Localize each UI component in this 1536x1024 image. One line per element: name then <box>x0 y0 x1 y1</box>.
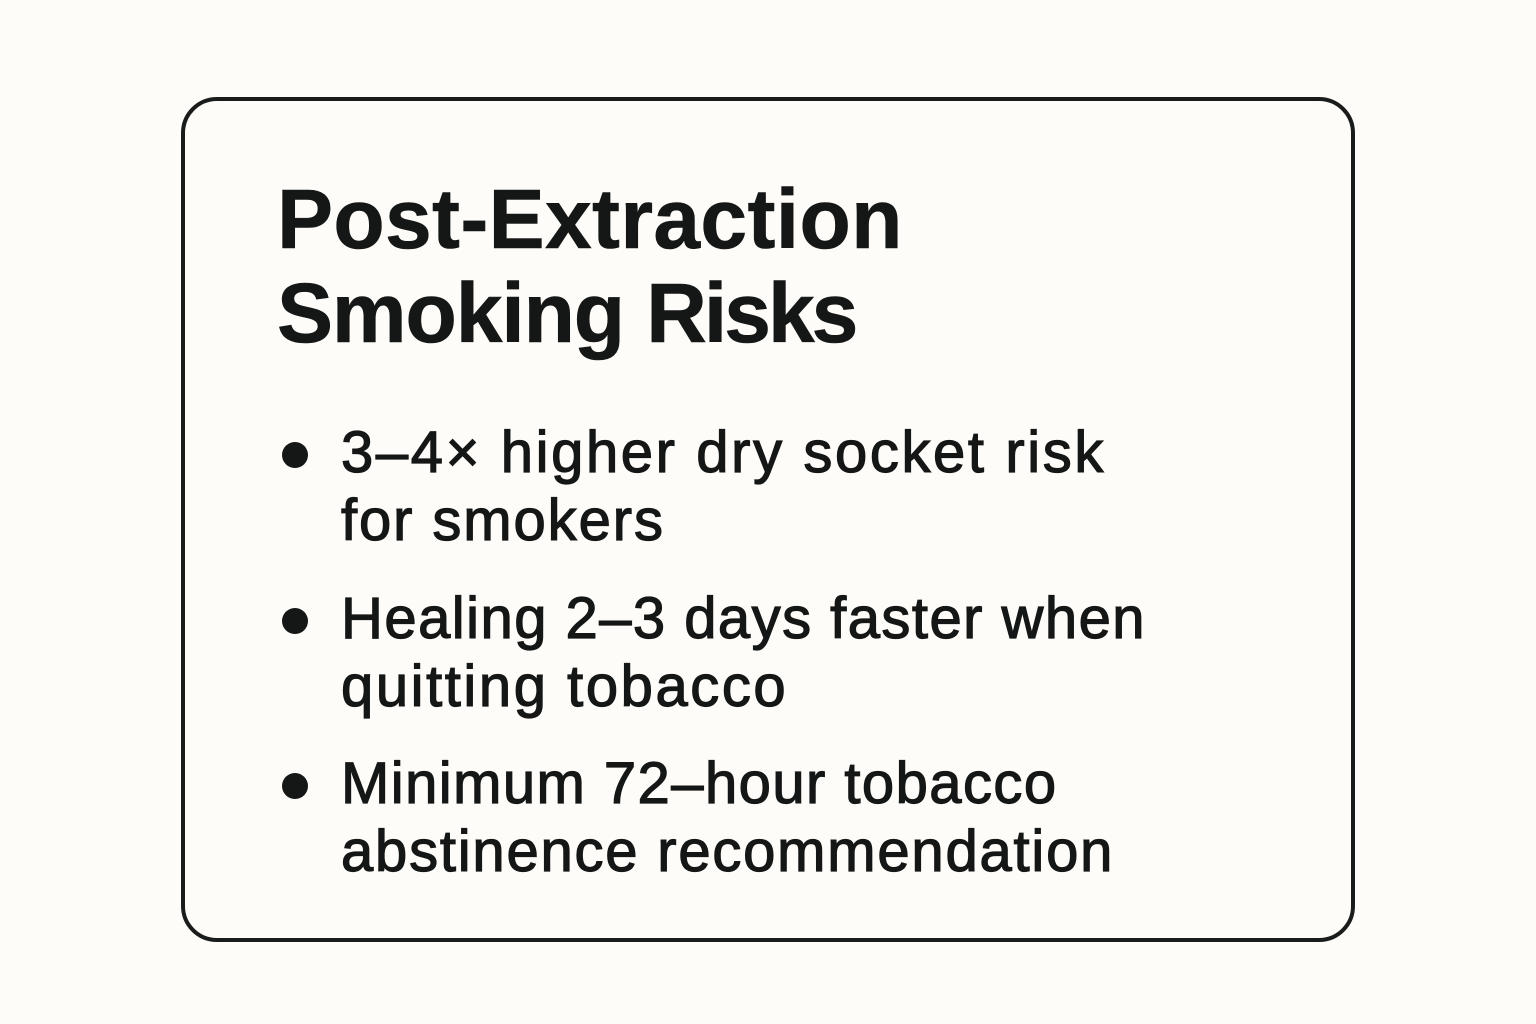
bullet 1 text: 3–4× higher dry socket risk <box>341 420 1106 485</box>
title: Smoking Risks <box>277 266 855 360</box>
bullet 1 text <box>341 420 1106 553</box>
bullet 3 text: Minimum 72–hour tobacco <box>341 751 1058 816</box>
title: Post-Extraction <box>277 172 903 266</box>
panel: card <box>181 97 1355 942</box>
bullet 3 text: abstinence recommendation <box>341 819 1114 884</box>
bullet 2 text <box>341 586 1146 719</box>
title <box>277 172 903 360</box>
bullet 3 icon <box>282 773 308 799</box>
bullet 2 icon <box>282 608 308 634</box>
bullet 1 icon <box>282 442 308 468</box>
bullet 1 text: for smokers <box>341 488 665 553</box>
bullet 2 text: quitting tobacco <box>341 654 788 719</box>
bullet 3 text <box>341 751 1114 884</box>
bullet 2 text: Healing 2–3 days faster when <box>341 586 1146 651</box>
